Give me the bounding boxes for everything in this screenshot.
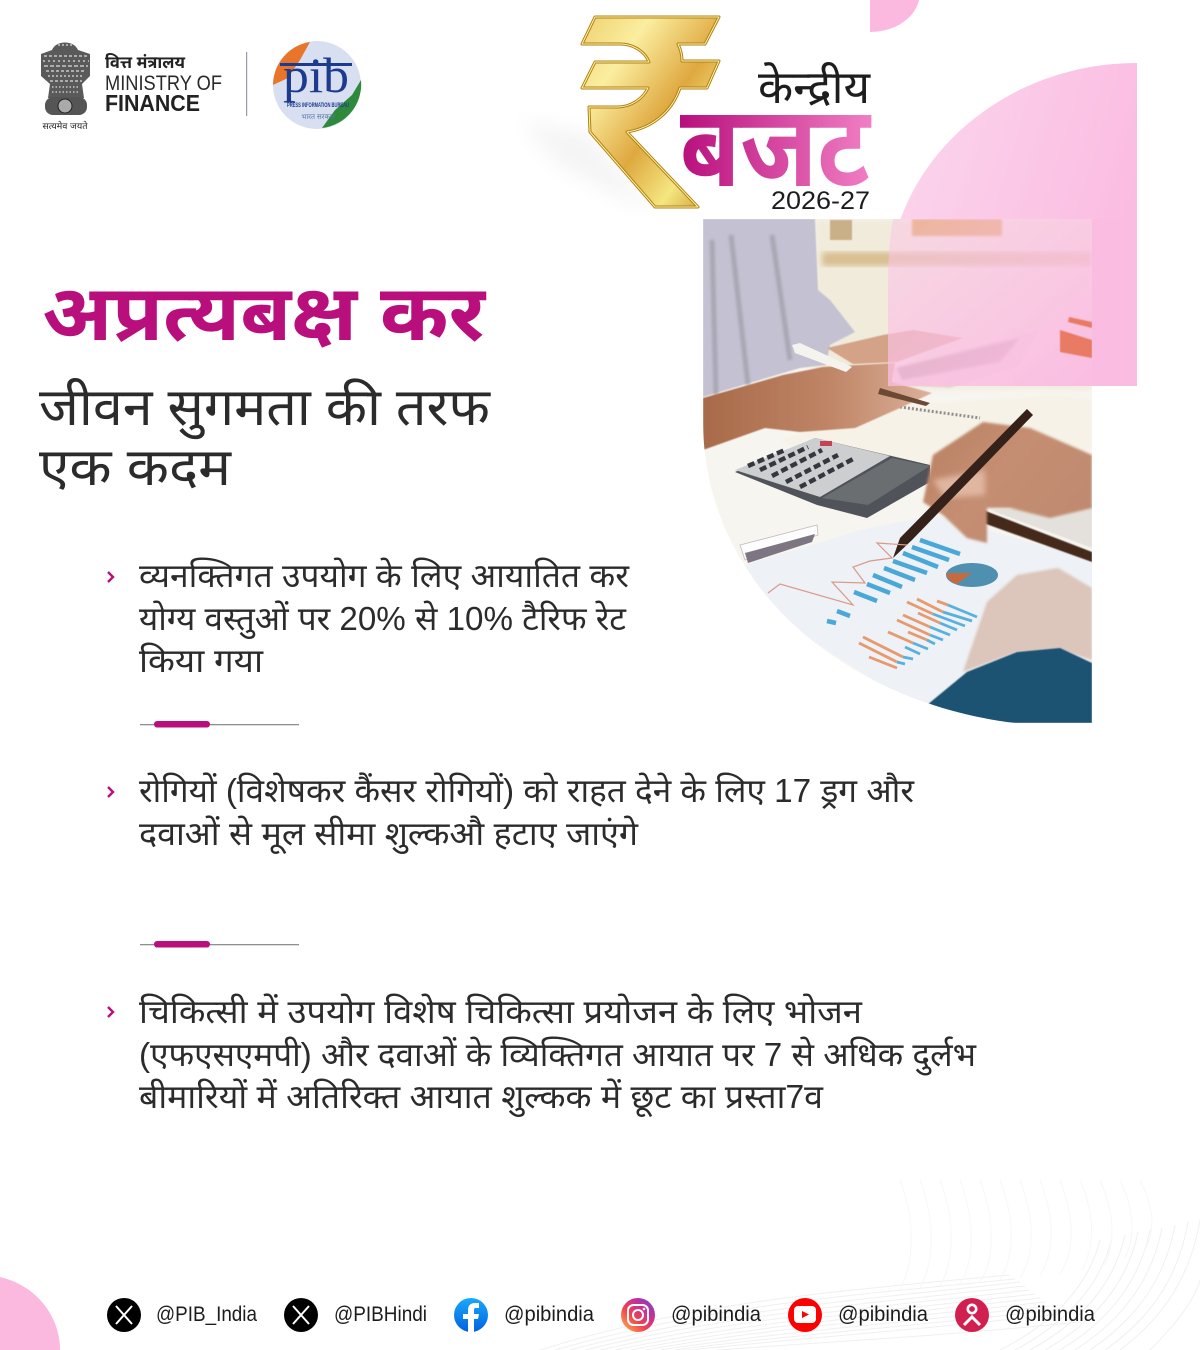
ministry of finance wordmark: [105, 52, 222, 116]
icon: instagram: [621, 1298, 761, 1332]
icon: koo: [955, 1298, 1095, 1332]
bajat title: बजट: [680, 84, 871, 211]
lower hand: [963, 568, 1092, 672]
chart paper: [745, 515, 1092, 723]
chart blue bars: [827, 540, 960, 623]
right hand: [923, 422, 1092, 543]
dark ruler: [975, 510, 1092, 562]
chart red line: [768, 543, 907, 605]
icon: facebook: @pibindia: [504, 1303, 594, 1326]
icon: national emblem: सत्यमेव जयते: [42, 120, 88, 131]
subtitle: [39, 378, 491, 497]
kendriya label: केन्द्रीय: [758, 60, 871, 113]
divider 1: [140, 721, 299, 728]
bullet 2: दवाओं से मूल सीमा शुल्कऔ हटाए जाएंगे: [139, 814, 639, 854]
bullet 3: [108, 992, 977, 1117]
chart orange and blue bars: [859, 599, 977, 668]
social footer: [107, 1298, 1095, 1332]
icon: gold rupee symbol: [582, 17, 719, 207]
decorative pink quarter panel back: [888, 63, 1137, 386]
ministry of finance wordmark: FINANCE: [105, 90, 200, 116]
icon: youtube: @pibindia: [838, 1303, 928, 1326]
bullet 3: चिकित्सी में उपयोग विशेष चिकित्सा प्रयोजन के लिए भोजन: [139, 992, 863, 1030]
background wave pattern: [540, 1180, 1200, 1350]
icon: X PIBHindi: @PIBHindi: [334, 1303, 427, 1326]
bullet 2: रोगियों (विशेषकर कैंसर रोगियों) को राहत देने के लिए 17 ड्रग और: [139, 771, 915, 810]
white pen: [792, 343, 852, 372]
decorative pink corner bottom left: [0, 1277, 60, 1350]
bullet 1: व्यनक्तिगत उपयोग के लिए आयातित कर: [139, 556, 630, 594]
bullet 1: किया गया: [139, 642, 265, 679]
ministry of finance wordmark: MINISTRY OF: [105, 72, 222, 95]
bullet 3: (एफएसएमपी) और दवाओं के व्यिक्तिगत आयात पर 7 से अधिक दुर्लभ: [139, 1035, 977, 1076]
icon: PIB logo: pib: [283, 47, 349, 103]
subtitle: एक कदम: [39, 439, 232, 497]
ministry of finance wordmark: वित्त मंत्रालय: [105, 52, 186, 72]
pie chart: [946, 563, 998, 587]
icon: X PIBHindi: [284, 1298, 427, 1332]
icon: PIB logo: भारत सरकार: [301, 114, 335, 121]
notepads: [740, 525, 818, 560]
icon: gold rupee shadow: [520, 120, 650, 207]
lower arm and hand with pen: [703, 363, 932, 450]
icon: koo: @pibindia: [1005, 1303, 1095, 1326]
notebook: [780, 395, 1092, 470]
pink strip right of photo: [1092, 219, 1137, 386]
icon: X PIB_India: [107, 1298, 257, 1332]
upper hand on tablet: [827, 330, 963, 364]
logo divider: [246, 52, 247, 116]
title: अप्रत्यबक्ष कर: [42, 269, 487, 357]
subtitle: जीवन सुगमता की तरफ: [39, 378, 491, 440]
icon: X PIB_India: @PIB_India: [156, 1303, 257, 1326]
pink translucent overlay on photo: [888, 219, 1092, 386]
decorative pink corner top: [870, 0, 919, 32]
budget year: 2026-27: [771, 187, 870, 215]
icon: instagram: @pibindia: [671, 1303, 761, 1326]
icon: PIB logo: [273, 41, 361, 129]
bullet 3: बीमारियों में अतिरिक्त आयात शुल्कक में छूट का प्रस्ता7व: [139, 1078, 824, 1117]
budget logo: [520, 17, 871, 215]
paper under right hand: [990, 505, 1092, 548]
header logos: [41, 41, 361, 131]
bullet 2: [108, 771, 915, 854]
photo: accountants with calculator and charts: [703, 219, 1092, 723]
icon: facebook: [454, 1298, 594, 1332]
divider 2: [140, 941, 299, 948]
tablet: [914, 386, 956, 388]
icon: national emblem: [41, 42, 90, 131]
icon: PIB logo: PRESS INFORMATION BUREAU: [287, 103, 349, 109]
calculator: [735, 438, 930, 518]
blue sleeve: [927, 648, 1092, 723]
bullet 1: योग्य वस्तुओं पर 20% से 10% टैरिफ रेट: [139, 599, 627, 639]
pen dark: [893, 409, 1033, 558]
red books in photo corner: [1060, 317, 1092, 358]
icon: youtube: [788, 1298, 928, 1332]
bullet 1: [108, 556, 630, 679]
shirt: [703, 219, 855, 397]
